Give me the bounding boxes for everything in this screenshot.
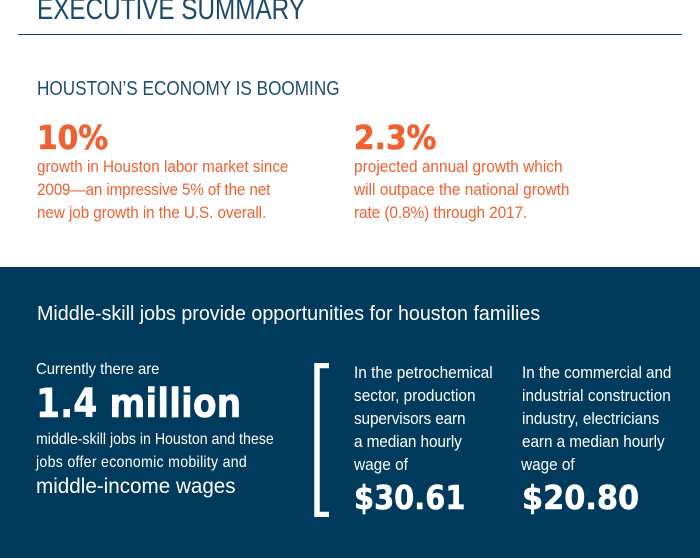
panel heading: Middle-skill jobs provide opportunities for houston families xyxy=(37,302,540,325)
description xyxy=(354,158,569,222)
description: growth in Houston labor market since xyxy=(37,158,288,176)
icon: bracket xyxy=(314,363,329,517)
stat: 10% growth xyxy=(37,118,288,222)
description: rate (0.8%) through 2017. xyxy=(354,204,527,222)
description: jobs offer economic mobility and xyxy=(36,454,247,471)
description: wage of xyxy=(521,456,575,474)
description: will outpace the national growth xyxy=(354,181,569,199)
description: supervisors earn xyxy=(354,410,465,428)
left text block xyxy=(36,361,274,498)
description: wage of xyxy=(354,456,408,474)
title rule xyxy=(18,34,682,35)
panel: middle-skill jobs xyxy=(0,267,700,558)
stat: 2.3% growth xyxy=(354,118,569,222)
description: industrial construction xyxy=(522,387,671,405)
description: earn a median hourly xyxy=(522,433,665,451)
description: sector, production xyxy=(354,387,476,405)
description: middle-skill jobs in Houston and these xyxy=(36,431,274,448)
description: In the commercial and xyxy=(522,364,671,382)
description: In the petrochemical xyxy=(354,364,493,382)
description: new job growth in the U.S. overall. xyxy=(37,204,266,222)
heading: economy: HOUSTON’S ECONOMY IS BOOMING xyxy=(37,78,340,100)
description: a median hourly xyxy=(354,433,462,451)
description: projected annual growth which xyxy=(354,158,563,176)
number: 2.3% xyxy=(354,118,436,157)
description: 2009—an impressive 5% of the net xyxy=(37,181,270,199)
description xyxy=(354,364,493,474)
wage: construction xyxy=(521,364,671,517)
description xyxy=(521,364,671,474)
emphasis: middle-income wages xyxy=(36,474,236,498)
big number: 1.4 million xyxy=(36,381,241,427)
description xyxy=(36,431,274,471)
wage: petrochemical xyxy=(354,364,493,517)
wage amount: $30.61 xyxy=(354,478,465,517)
wage amount: $20.80 xyxy=(522,478,639,517)
number: 10% xyxy=(37,118,108,157)
description: industry, electricians xyxy=(522,410,659,428)
description xyxy=(37,158,288,222)
intro: Currently there are xyxy=(36,361,159,378)
